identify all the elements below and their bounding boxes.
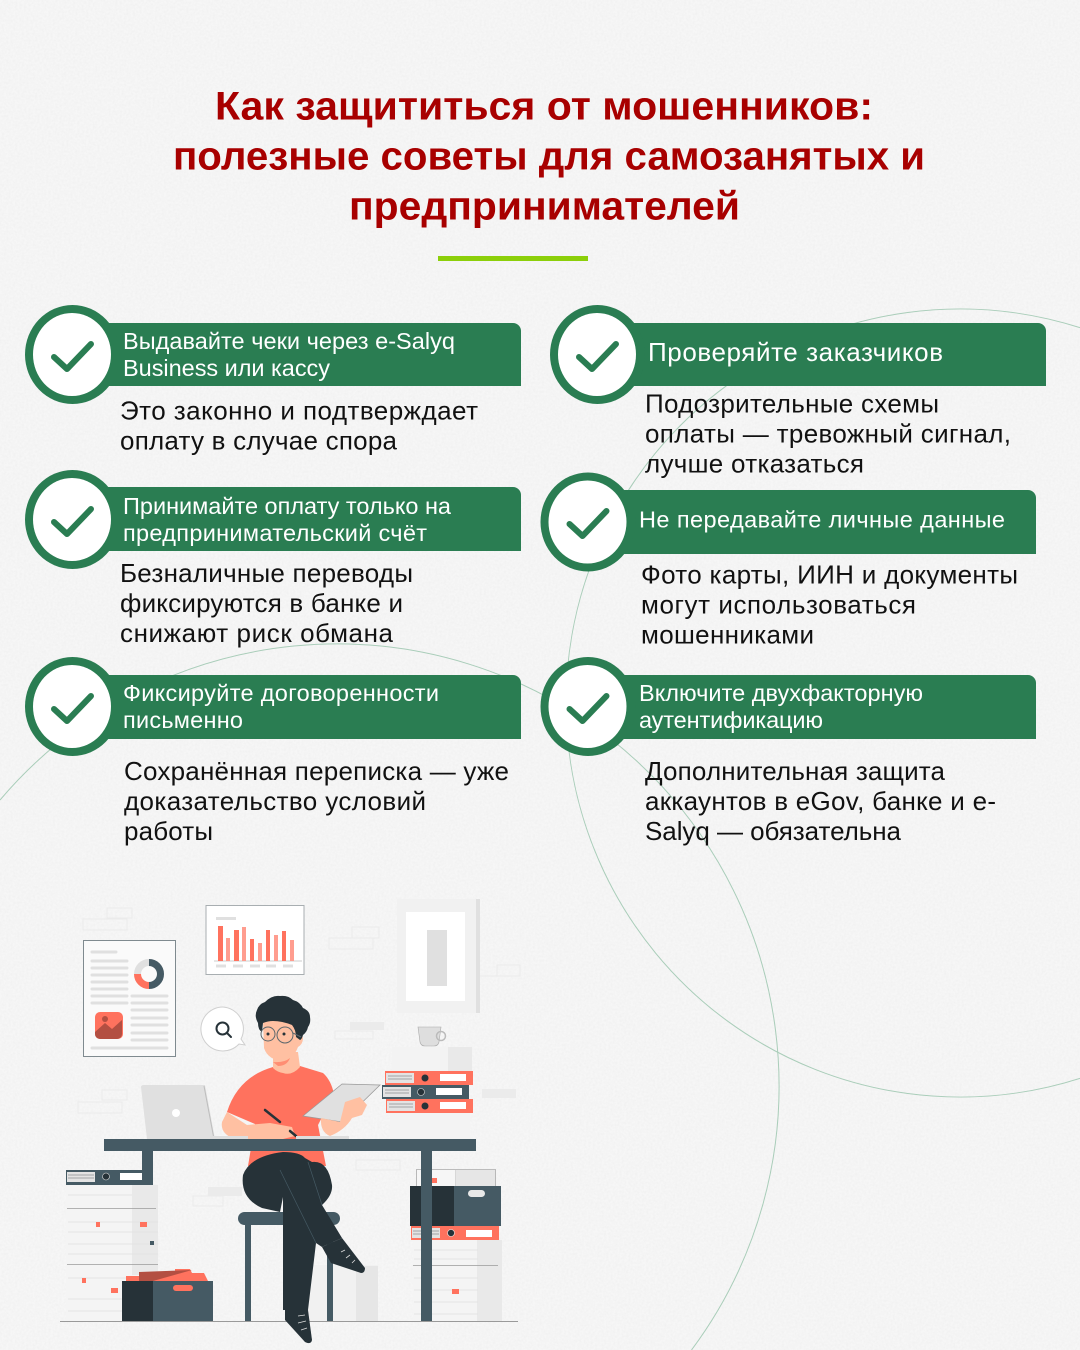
body text: Фото карты, ИИН и документы — [641, 560, 1018, 590]
stacked boxes on right — [410, 1170, 502, 1321]
body text: оплаты — тревожный сигнал, — [645, 418, 1011, 448]
body text: Это законно и подтверждает — [120, 396, 478, 426]
header bar — [610, 675, 1036, 739]
body text: могут использоваться — [641, 590, 916, 620]
icon: check badge — [540, 472, 636, 572]
body text: Salyq — обязательна — [645, 816, 902, 846]
floor line — [60, 1320, 518, 1322]
legs — [243, 1152, 342, 1310]
report document — [84, 940, 176, 1056]
icon: check badge — [25, 470, 120, 569]
body text: доказательство условий — [124, 786, 426, 816]
header bar — [620, 323, 1046, 386]
shoe raised — [322, 1238, 365, 1273]
body text — [641, 560, 1018, 650]
header bar — [95, 487, 521, 551]
title: предпринимателей — [349, 184, 740, 228]
body text: Подозрительные схемы — [645, 388, 939, 418]
title accent line — [438, 256, 588, 261]
heading — [123, 328, 455, 381]
heading: Принимайте оплату только на — [123, 493, 452, 519]
stool — [238, 1212, 340, 1321]
title: полезные советы для самозанятых и — [173, 134, 925, 178]
body text: лучше отказаться — [645, 448, 864, 478]
panel: tip 3 written agreements — [25, 657, 521, 846]
person — [210, 996, 380, 1343]
icon: check badge — [25, 305, 120, 404]
heading: Business или кассу — [123, 355, 330, 381]
heading: Проверяйте заказчиков — [648, 337, 943, 367]
panel: tip 4 check clients — [550, 305, 1046, 478]
panel: tip 1 receipts — [25, 305, 521, 456]
body text: фиксируются в банке и — [120, 588, 403, 618]
writing arm — [222, 1112, 295, 1139]
body text: Дополнительная защита — [645, 756, 946, 786]
search speech bubble — [201, 1007, 245, 1051]
coffee cup — [418, 1027, 446, 1046]
shoe on floor — [285, 1310, 312, 1343]
desk — [104, 1139, 476, 1321]
heading — [639, 680, 923, 733]
paper stack with folder: left of desk — [66, 1170, 158, 1321]
header bar — [610, 490, 1036, 554]
heading: Не передавайте личные данные — [639, 506, 1005, 532]
paper stack behind stool — [308, 1265, 378, 1321]
hair — [256, 996, 310, 1040]
body text: работы — [124, 816, 213, 846]
heading — [123, 680, 439, 733]
paper stack and folders: right of desk — [382, 1047, 473, 1139]
panel: tip 6 two-factor — [540, 657, 1036, 846]
laptop base and notebook edge — [210, 1136, 349, 1139]
heading: Фиксируйте договоренности — [123, 680, 439, 706]
body text — [124, 756, 509, 846]
panel: tip 5 personal data — [540, 472, 1036, 650]
heading: аутентификацию — [639, 707, 823, 733]
heading: Выдавайте чеки через e-Salyq — [123, 328, 455, 354]
heading — [123, 493, 452, 546]
heading: Включите двухфакторную — [639, 680, 923, 706]
file box on floor — [122, 1269, 213, 1321]
body text — [120, 396, 478, 456]
laptop — [141, 1085, 215, 1139]
picture frame — [397, 899, 480, 1013]
header bar — [95, 675, 521, 739]
glasses — [261, 1027, 301, 1043]
neck and face — [263, 1020, 303, 1074]
body text: оплату в случае спора — [120, 426, 398, 456]
notepad — [303, 1084, 380, 1122]
body text: снижают риск обмана — [120, 618, 394, 648]
header bar — [95, 323, 521, 386]
heading: письменно — [123, 707, 243, 733]
icon: check badge — [540, 657, 636, 756]
title: Как защититься от мошенников: — [215, 84, 873, 128]
body text — [645, 756, 996, 846]
body text — [120, 558, 413, 648]
bar chart poster — [206, 906, 304, 974]
donut chart — [138, 962, 160, 986]
picture thumbnail — [95, 1012, 123, 1039]
illustration: freelancer at desk — [60, 899, 520, 1343]
icon: check badge — [25, 657, 120, 756]
body text: Безналичные переводы — [120, 558, 413, 588]
shirt — [227, 1066, 334, 1166]
body text: Сохранённая переписка — уже — [124, 756, 509, 786]
heading: предпринимательский счёт — [123, 520, 427, 546]
body text: мошенниками — [641, 620, 814, 650]
holding arm — [321, 1097, 367, 1136]
title — [173, 84, 925, 228]
pen — [265, 1110, 296, 1136]
body text: аккаунтов в eGov, банке и e- — [645, 786, 996, 816]
panel: tip 2 business account — [25, 470, 521, 648]
body text — [645, 388, 1011, 478]
icon: check badge — [550, 305, 645, 404]
